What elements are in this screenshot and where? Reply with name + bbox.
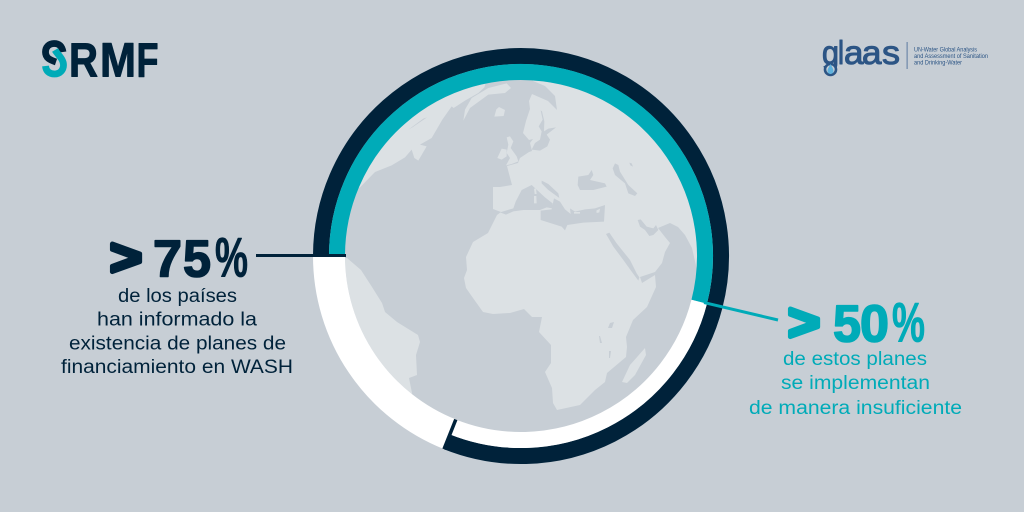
description <box>749 349 962 419</box>
tagline <box>914 46 988 66</box>
stat <box>788 290 925 354</box>
connector: right callout <box>704 303 778 320</box>
description <box>61 286 293 378</box>
description: de estos planes <box>783 349 927 370</box>
wordmark glaas: l <box>838 34 844 71</box>
stat: 5 <box>183 230 211 288</box>
wordmark glaas: a <box>844 34 864 71</box>
wordmark glaas: g <box>822 34 839 71</box>
wordmark glaas: a <box>862 34 882 71</box>
stat: 0 <box>860 296 889 354</box>
connector: left callout <box>256 254 346 257</box>
stat: % <box>215 226 248 288</box>
stat: > <box>110 229 142 287</box>
land: South America <box>345 258 420 394</box>
description: financiamiento en WASH <box>61 357 293 378</box>
description: se implementan <box>781 373 930 394</box>
description: de los países <box>118 286 237 307</box>
wordmark RMF: M <box>100 34 136 88</box>
tagline: UN-Water Global Analysis <box>914 46 977 54</box>
description: de manera insuficiente <box>749 398 962 419</box>
description: han informado la <box>97 310 257 330</box>
ring divider tick <box>444 420 456 449</box>
callout: 50 percent <box>749 290 962 419</box>
land: North America and Greenland <box>359 84 511 188</box>
wordmark glaas: s <box>882 34 900 71</box>
ring segment: white, remainder <box>453 302 699 440</box>
icon: water drop loop <box>825 64 836 75</box>
wordmark RMF <box>69 34 158 88</box>
stat: 7 <box>153 230 182 288</box>
stat: % <box>892 290 925 354</box>
wordmark RMF: R <box>69 34 98 88</box>
land: British Isles and Iceland <box>497 110 556 165</box>
land: Madagascar and African lakes <box>599 322 646 383</box>
tagline: and Assessment of Sanitation <box>914 53 988 60</box>
icon: interlinked water drop S <box>46 44 64 74</box>
stat <box>110 226 248 288</box>
ring <box>321 56 721 456</box>
stat: 5 <box>833 296 861 354</box>
stat: > <box>788 294 820 352</box>
seas: Mediterranean and Black Sea <box>500 170 607 230</box>
ring segment: teal, insufficiently implemented <box>337 72 705 302</box>
ring segment: white, countries without plans <box>329 256 450 434</box>
logo: GLAAS <box>822 34 988 75</box>
sea: Baltic <box>532 110 556 151</box>
seas: Caspian, Aral, Red Sea and Persian Gulf <box>606 163 658 281</box>
globe <box>345 80 697 410</box>
land: Europe, Africa and Asia <box>464 80 697 410</box>
wordmark glaas <box>822 34 900 71</box>
tagline: and Drinking-Water <box>914 60 963 66</box>
wordmark RMF: F <box>136 34 158 88</box>
logo: SRMF <box>46 34 158 88</box>
callout: 75 percent <box>61 226 293 378</box>
ring segment: dark, 75 percent <box>321 56 721 456</box>
description: existencia de planes de <box>69 334 286 354</box>
